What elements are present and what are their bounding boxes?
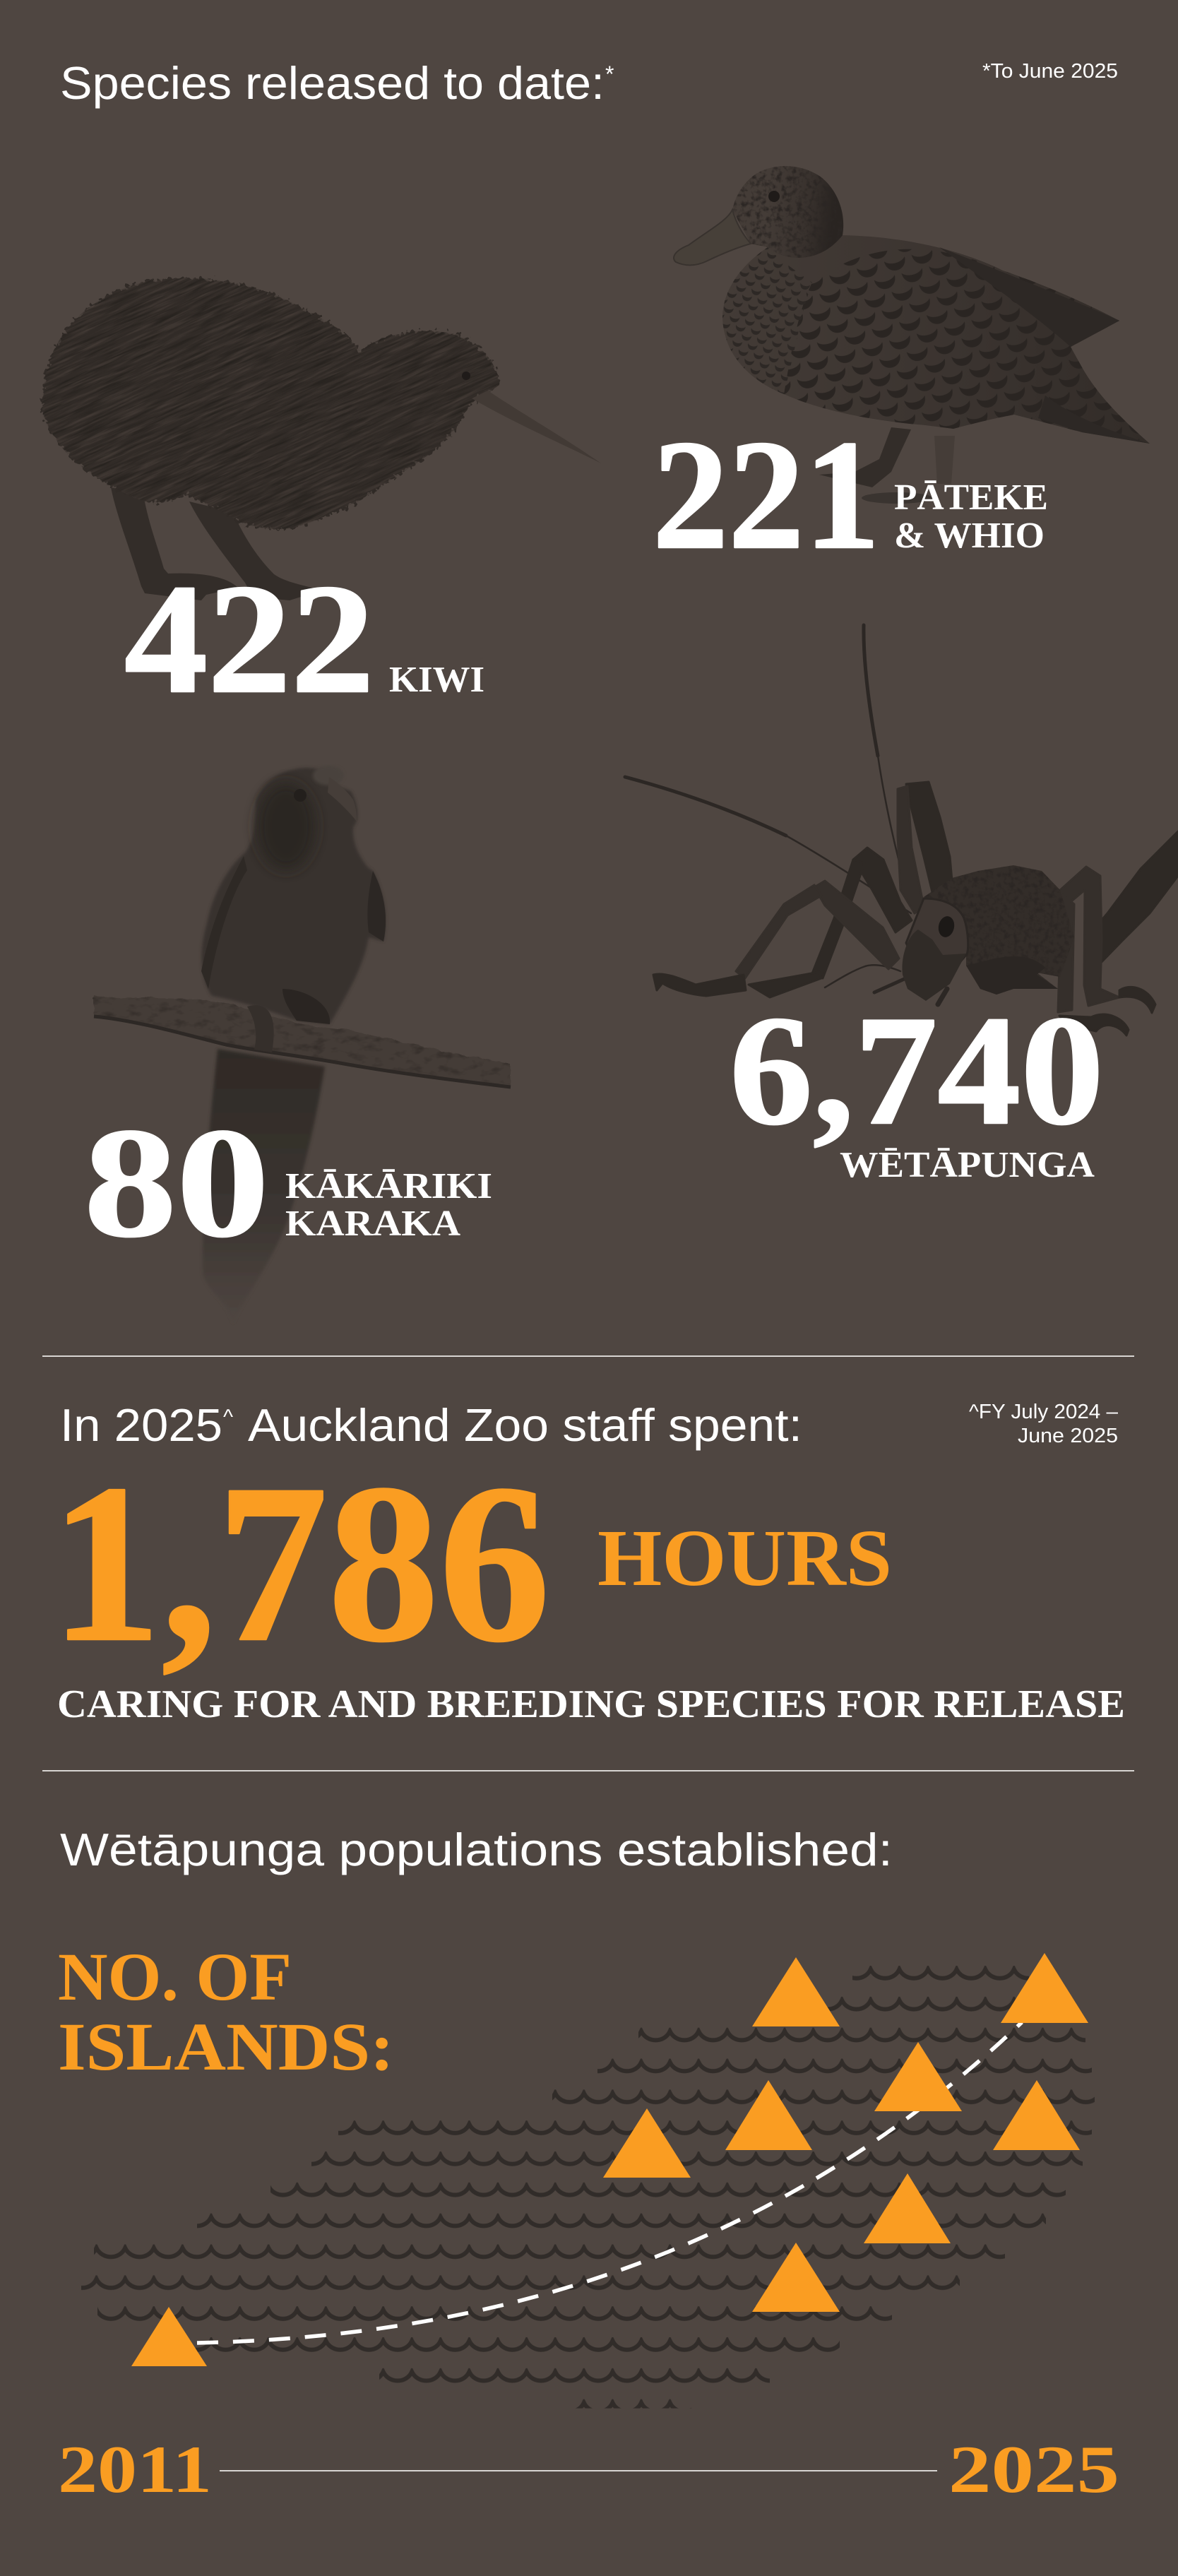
illustration: duck — [674, 166, 1150, 504]
timeline: 2011 to 2025: 2011 — [58, 2432, 212, 2507]
heading: species released: Species released to date: — [60, 57, 605, 109]
footnote: financial year: ^FY July 2024 – — [969, 1401, 1119, 1423]
timeline: 2011 to 2025 — [58, 2432, 1119, 2507]
heading: staff hours: In 2025 — [60, 1399, 222, 1451]
stat: pateke and whio: PĀTEKE — [894, 477, 1048, 518]
footnote: financial year: June 2025 — [1018, 1425, 1118, 1447]
stat: 1,786 hours: 1,786 — [50, 1438, 550, 1689]
stat: kiwi: 422 — [124, 552, 374, 726]
label: number of islands: ISLANDS: — [58, 2009, 394, 2084]
stat: pateke and whio — [653, 408, 1048, 582]
stat: kiwi — [124, 552, 484, 726]
label: number of islands: NO. OF — [58, 1939, 292, 2014]
heading: wetapunga populations: Wētāpunga populations established: — [60, 1824, 893, 1875]
dashed trend line — [197, 2022, 1022, 2343]
timeline: 2011 to 2025: 2025 — [948, 2432, 1119, 2507]
stat: kakariki karaka: 80 — [84, 1096, 269, 1270]
chart: islands over time — [81, 1953, 1095, 2409]
heading: staff hours — [60, 1399, 802, 1451]
stat: kakariki karaka: KARAKA — [285, 1204, 460, 1244]
stat: pateke and whio: 221 — [653, 408, 880, 582]
stat: 1,786 hours — [50, 1438, 892, 1689]
sea waves — [81, 1964, 1095, 2409]
caption: caring for and breeding: CARING FOR AND BREEDING SPECIES FOR RELEASE — [57, 1682, 1125, 1726]
heading: staff hours: Auckland Zoo staff spent: — [248, 1399, 802, 1451]
illustration: wetapunga — [625, 625, 1178, 1035]
footnote: to June 2025: *To June 2025 — [982, 60, 1118, 83]
stat: kiwi: KIWI — [389, 660, 484, 700]
footnote: financial year — [969, 1401, 1119, 1447]
stat: pateke and whio: & WHIO — [894, 516, 1045, 556]
illustration: kakariki parrot on branch — [94, 766, 511, 1323]
illustration: kiwi — [40, 275, 600, 600]
stat: wetapunga: 6,740 — [730, 984, 1104, 1158]
label: number of islands — [58, 1939, 394, 2084]
island markers — [131, 1953, 1088, 2366]
heading: staff hours: ^ — [223, 1406, 233, 1429]
heading: species released: * — [605, 61, 614, 87]
stat: 1,786 hours: HOURS — [597, 1513, 892, 1603]
stat: kakariki karaka — [84, 1096, 492, 1270]
stat: wetapunga: WĒTĀPUNGA — [840, 1145, 1095, 1185]
stat: kakariki karaka: KĀKĀRIKI — [285, 1166, 492, 1206]
